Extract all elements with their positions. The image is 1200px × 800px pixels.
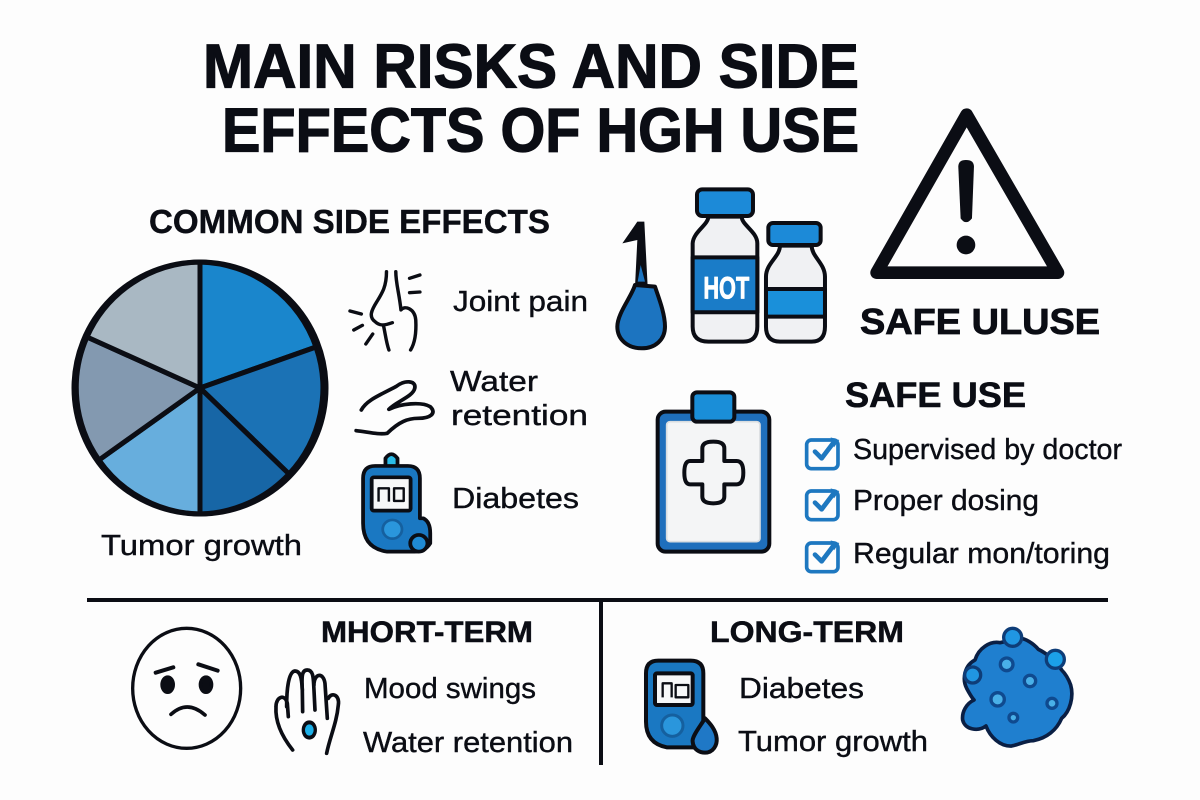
long term list: Tumor growth (738, 726, 928, 758)
label: diabetes: Diabetes (452, 483, 579, 515)
title: MAIN RISKS AND SIDE (203, 32, 859, 102)
icon: glucose meter (363, 454, 430, 552)
pie label: tumor growth: Tumor growth (101, 530, 302, 562)
heading: safe use: SAFE USE (845, 376, 1026, 415)
long term list (738, 673, 928, 758)
icon: joint pain (350, 272, 420, 350)
icon: hand with drop (276, 670, 339, 753)
title: EFFECTS OF HGH USE (222, 96, 859, 166)
check item: supervised by doctor: Supervised by doctor (853, 434, 1122, 466)
icon: small vial (766, 223, 825, 342)
heading: short term: MHORT-TERM (321, 616, 533, 649)
short term list (363, 673, 573, 759)
pie chart (74, 262, 326, 514)
icon: glucose meter with drop (646, 661, 717, 753)
checklist: safe use (807, 434, 1122, 572)
icon: swollen hand (356, 382, 433, 434)
icon: dropper (617, 222, 665, 348)
label: joint pain: Joint pain (453, 286, 588, 318)
icon: large vial: HOT (703, 271, 749, 306)
icon: tumor cell (963, 628, 1072, 746)
icon: warning triangle (877, 115, 1058, 273)
icon: sad face (133, 628, 241, 748)
check item: proper dosing: Proper dosing (853, 485, 1039, 517)
icon: clipboard (658, 392, 769, 552)
long term list: Diabetes (739, 673, 864, 705)
heading: long term: LONG-TERM (710, 616, 904, 649)
label: water retention (450, 366, 588, 432)
short term list: Water retention (363, 727, 573, 759)
label: water retention: retention (451, 400, 588, 432)
heading: common side effects: COMMON SIDE EFFECTS (149, 203, 550, 240)
title (203, 32, 859, 166)
label: safe uluse: SAFE ULUSE (860, 301, 1100, 342)
short term list: Mood swings (364, 673, 536, 705)
icon: large vial (693, 189, 757, 342)
label: water retention: Water (450, 366, 538, 398)
check item: regular monitoring: Regular mon/toring (853, 538, 1110, 570)
